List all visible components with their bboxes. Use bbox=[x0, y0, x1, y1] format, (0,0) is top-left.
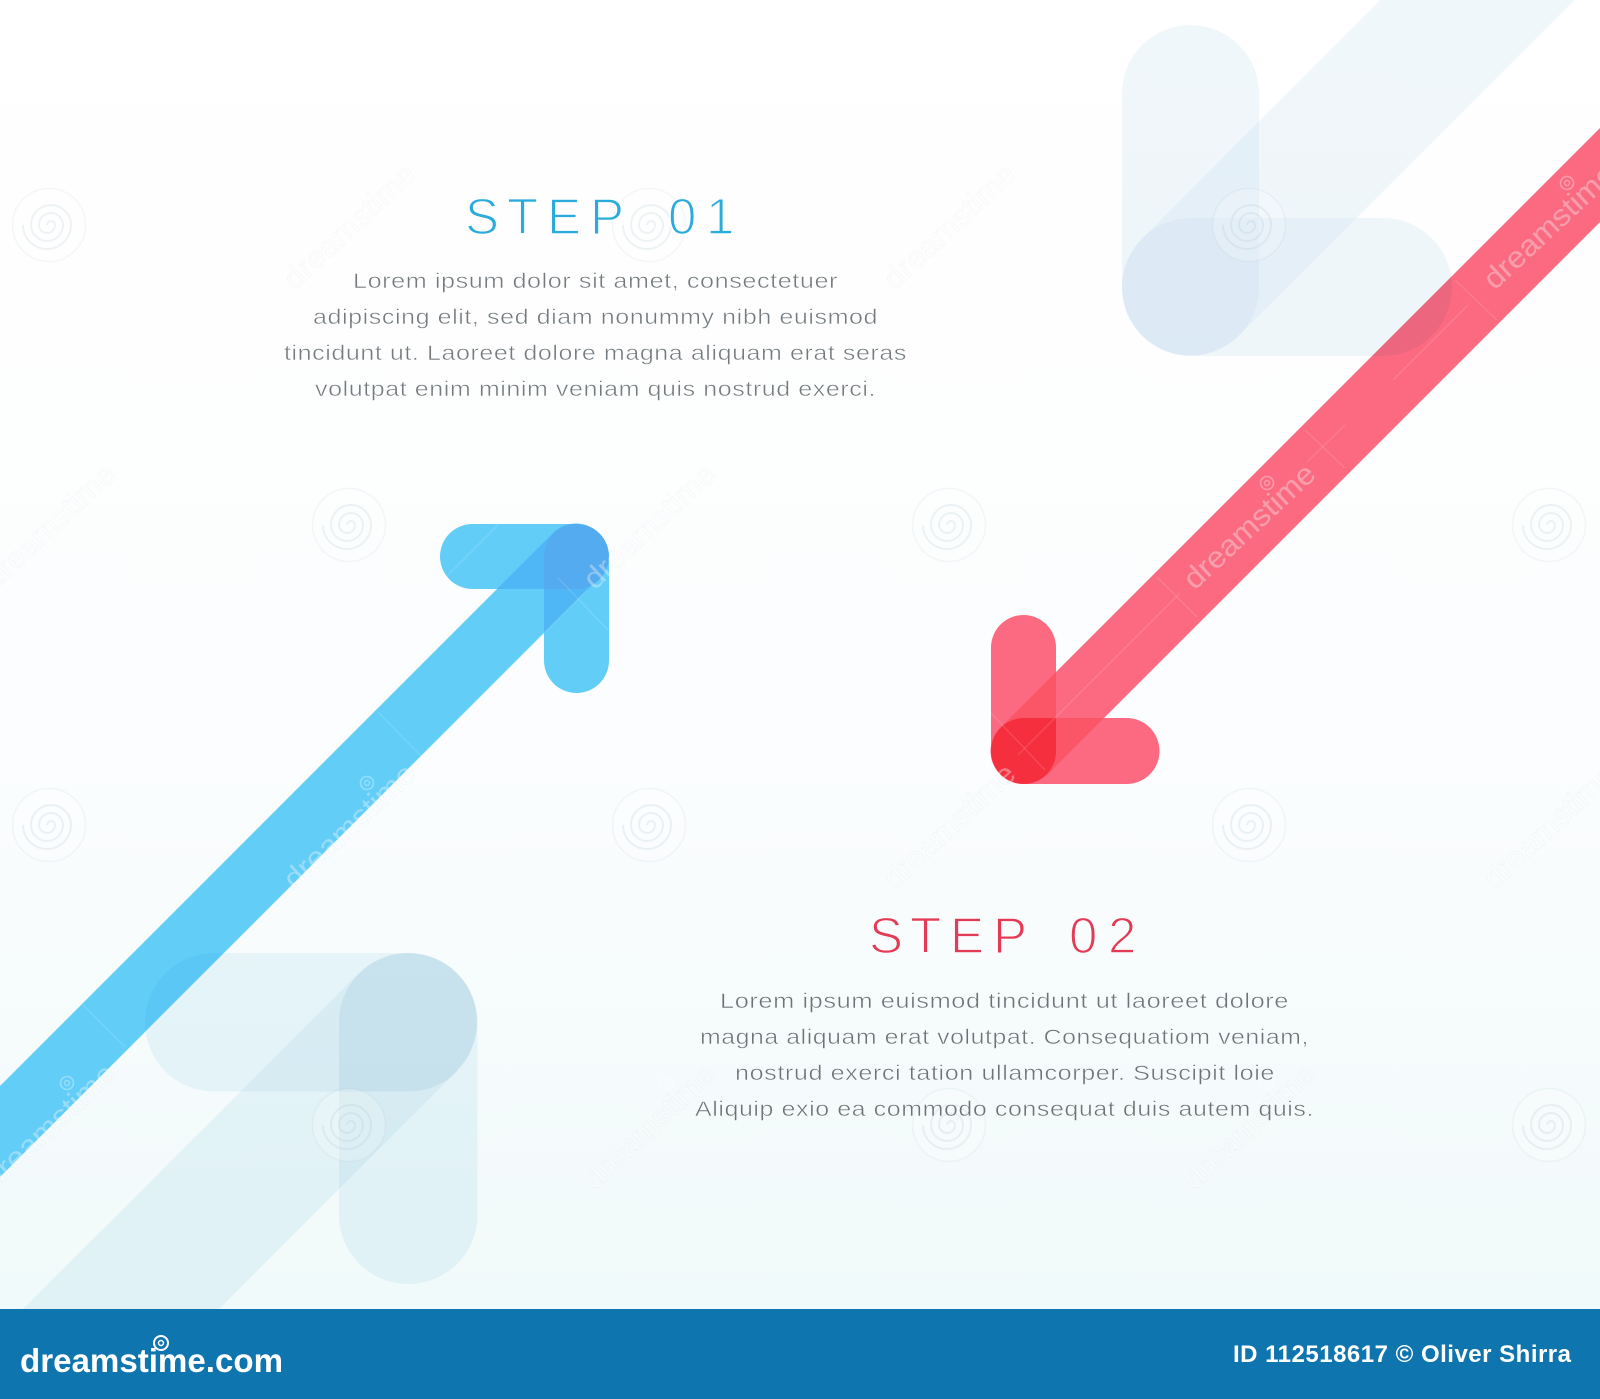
diagonal watermark wordmarks: dreamstime bbox=[277, 757, 422, 896]
watermark spirals bbox=[12, 188, 1586, 1162]
diagonal watermark wordmarks: dreamstime bbox=[877, 157, 1022, 296]
heading: step 01: STEP 01 bbox=[465, 188, 734, 245]
text block: step 01 description: adipiscing elit, sed diam nonummy nibh euismod bbox=[313, 305, 878, 329]
ghost arrow: top right bbox=[1122, 0, 1574, 356]
text block: step 02 description bbox=[695, 989, 1314, 1121]
text block: step 02 description: Aliquip exio ea commodo consequat duis autem quis. bbox=[695, 1097, 1314, 1121]
ghost arrow: bottom left bbox=[22, 953, 478, 1310]
text block: step 01 description: volutpat enim minim veniam quis nostrud exerci. bbox=[315, 377, 876, 401]
diagonal watermark wordmarks: dreamstime bbox=[277, 157, 422, 296]
text block: step 02 description: magna aliquam erat volutpat. Consequatiom veniam, bbox=[700, 1025, 1309, 1049]
arrow: red pointing down-left bbox=[990, 128, 1600, 784]
diagonal watermark wordmarks: dreamstime bbox=[577, 1057, 722, 1196]
arrow: blue pointing up-right bbox=[0, 524, 609, 1177]
footer bar bbox=[0, 1309, 1600, 1399]
footer credit: ID 112518617 © Oliver Shirra bbox=[1233, 1341, 1572, 1368]
diagonal watermark wordmarks: dreamstime bbox=[1177, 457, 1322, 596]
footer logo: dreamstime.com bbox=[20, 1342, 283, 1379]
diagonal watermark wordmarks: dreamstime bbox=[877, 757, 1022, 896]
text block: step 01 description bbox=[284, 269, 907, 401]
text block: step 01 description: Lorem ipsum dolor sit amet, consectetuer bbox=[353, 269, 838, 293]
text block: step 02 description: Lorem ipsum euismod tincidunt ut laoreet dolore bbox=[720, 989, 1289, 1013]
diagonal watermark wordmarks: dreamstime bbox=[1177, 1057, 1322, 1196]
heading: step 02: STEP 02 bbox=[869, 907, 1136, 964]
text block: step 02 description: nostrud exerci tation ullamcorper. Suscipit loie bbox=[735, 1061, 1275, 1085]
diagonal watermark wordmarks: dreamstime bbox=[577, 457, 722, 596]
diagonal watermark wordmarks bbox=[0, 157, 1600, 1196]
text block: step 01 description: tincidunt ut. Laoreet dolore magna aliquam erat seras bbox=[284, 341, 907, 365]
